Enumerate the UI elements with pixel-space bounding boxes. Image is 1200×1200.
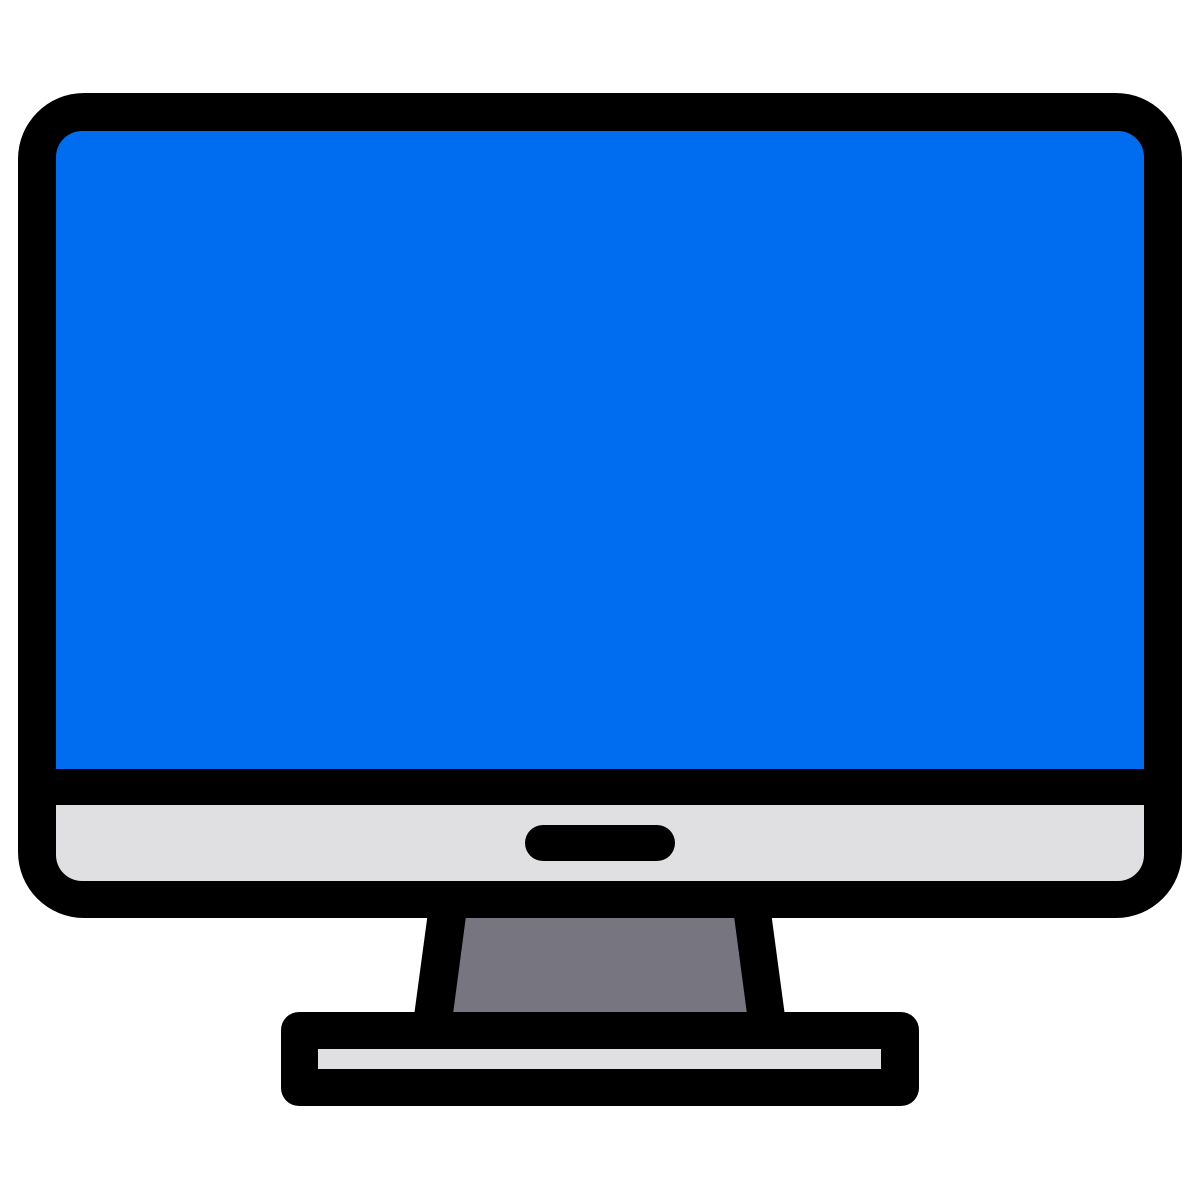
- monitor stand neck: [414, 912, 785, 1016]
- screen: [56, 131, 1144, 769]
- chin: [56, 805, 1144, 881]
- monitor base: [281, 1012, 919, 1106]
- monitor body: [18, 93, 1182, 918]
- power button: [525, 825, 675, 861]
